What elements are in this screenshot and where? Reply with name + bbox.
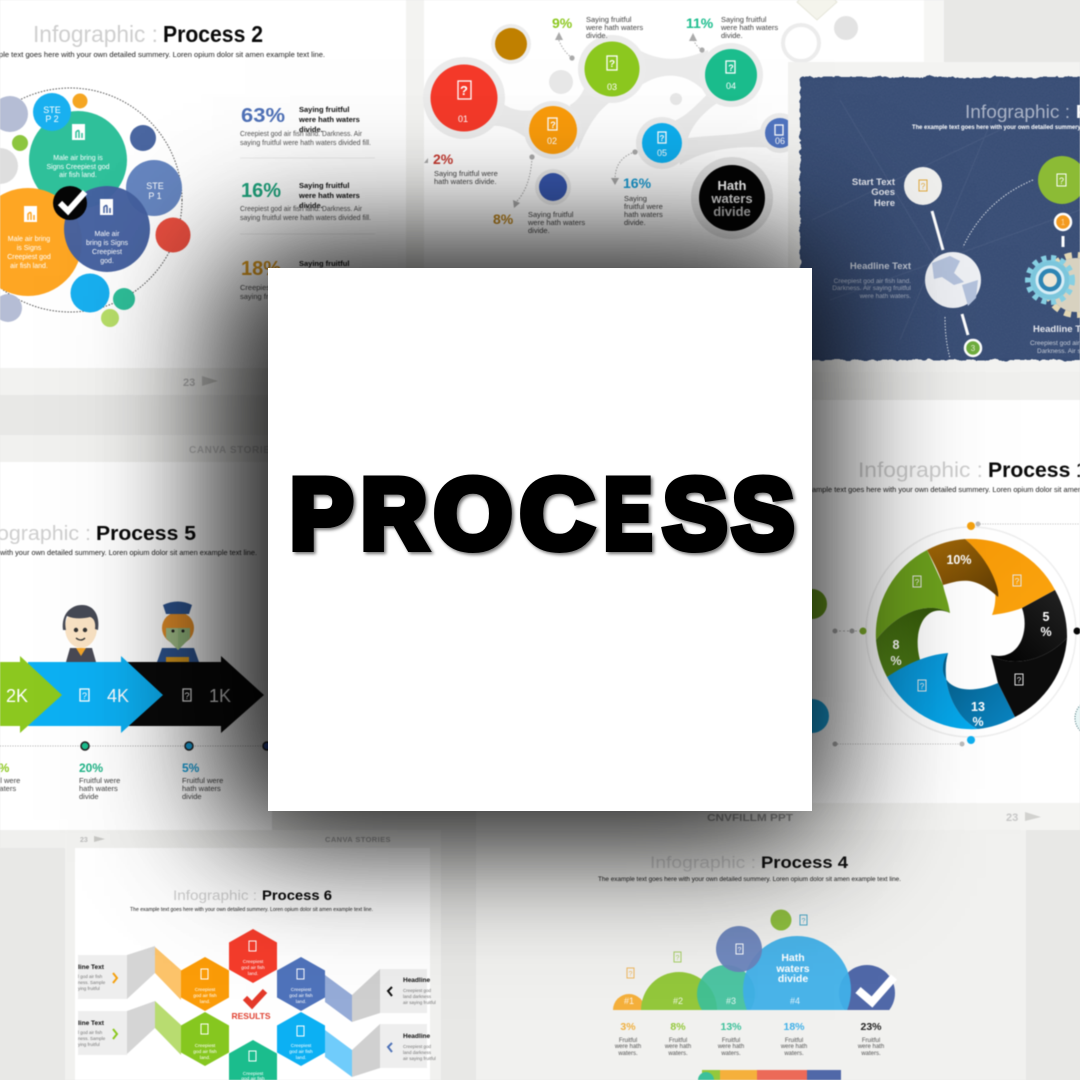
- heading: dark slide: Infographic :: [965, 102, 1070, 122]
- stat list: process 2: were hath waters: [298, 115, 360, 124]
- timeline: [0, 742, 271, 801]
- chart: pinwheel donut: 13: [971, 700, 985, 714]
- chart: overlapping circles: is Signs: [17, 245, 42, 252]
- percent labels: 8%: [493, 211, 514, 227]
- stat list: process 2: Creepiest god: [240, 283, 287, 292]
- percent labels: Saying: [624, 194, 647, 203]
- ribbons: Creepiest god: [403, 1044, 432, 1049]
- stat row: 23%: [860, 1021, 882, 1033]
- stat row: were hath: [614, 1044, 641, 1050]
- timeline: hath waters: [182, 784, 221, 793]
- percent labels: divide.: [528, 226, 550, 235]
- ribbons: air saying fruitful: [403, 1056, 436, 1061]
- chart: overlapping circles: Male air: [95, 231, 120, 238]
- process path: globe and gears: ?: [1059, 176, 1064, 186]
- icon: man: [63, 605, 98, 662]
- stat row: waters.: [860, 1051, 881, 1057]
- chart: overlapping circles: Creepiest: [92, 249, 122, 256]
- heading: process 5: [0, 523, 257, 557]
- hexagons: god air fish: [193, 993, 217, 999]
- percent labels: divide.: [624, 218, 646, 227]
- stat row: were hath: [717, 1044, 744, 1050]
- title: PROCESS: R: [361, 458, 427, 569]
- heading: process 4: Process 4: [761, 853, 849, 872]
- percent labels: divide.: [721, 31, 743, 40]
- stat row: were hath: [780, 1044, 807, 1050]
- decorative top-right circles: [783, 0, 858, 61]
- percent labels: 16%: [623, 175, 652, 191]
- heading: process 2: ple text goes here with your own detailed summery. Loren opium dolor sit amen example text line.: [0, 50, 325, 59]
- chart: overlapping circles: STE: [43, 105, 61, 115]
- numbered circles: ?: [460, 83, 468, 98]
- text blocks: dark slide: Creepiest god air fish land.: [834, 278, 911, 285]
- timeline: 20%: [79, 761, 103, 775]
- heading: process 2: Infographic :: [33, 21, 158, 47]
- panel: process 6 slide: [65, 830, 441, 1080]
- panel: process 4 slide: CNVFILLM PPT: [707, 813, 793, 824]
- timeline: hath waters: [79, 784, 118, 793]
- heading: process 4: [598, 853, 901, 883]
- stat row: Fruitful: [669, 1038, 687, 1044]
- numbered circles: ?: [550, 120, 556, 130]
- panel: dark blue process slide: [788, 62, 1080, 400]
- page number: 23: [183, 377, 195, 389]
- heading: process 6: Process 6: [262, 887, 332, 903]
- arrow chart: [0, 656, 264, 733]
- percent labels: were hath waters: [527, 218, 585, 227]
- panel: process 4 slide: [476, 803, 1080, 1080]
- ribbons: Headline: [403, 977, 430, 984]
- stat list: process 2: 18%: [241, 258, 281, 280]
- hexagons: Creepiest: [195, 1043, 216, 1049]
- stat row: 18%: [783, 1021, 805, 1033]
- callout connectors: [795, 522, 1080, 746]
- chart: semi circles: waters: [775, 963, 810, 975]
- percent labels: hath waters: [624, 210, 663, 219]
- chart: semi circles: divide: [778, 973, 808, 985]
- stat row: Fruitful: [862, 1038, 880, 1044]
- heading: process 1: Infographic :: [858, 459, 983, 482]
- hexagons: god air fish: [241, 965, 265, 971]
- stat list: process 2: saying fruitful were hath waters divided fill.: [240, 213, 371, 222]
- process path: globe and gears: 3: [971, 344, 976, 353]
- chart: semi circles: ?: [676, 955, 680, 962]
- numbered circles: 01: [458, 114, 468, 124]
- ribbons: [78, 946, 436, 1077]
- chart: overlapping circles: Creepiest god: [7, 254, 51, 261]
- ribbons: ying fruitful: [78, 986, 100, 991]
- stat list: process 2: were hath waters: [298, 191, 360, 200]
- results badge: [232, 991, 271, 1021]
- chart: semi circles: ?: [629, 971, 633, 978]
- stat row: were hath: [664, 1044, 691, 1050]
- stat list: process 2: saying fruitful were hath waters divided fill.: [240, 138, 371, 147]
- panel: process 1 slide: [795, 400, 1080, 803]
- chart: overlapping circles: bring is Signs: [86, 240, 129, 247]
- chart: overlapping circles: STE: [146, 181, 164, 191]
- stat list: process 2: divide.: [299, 201, 323, 210]
- title: PROCESS: O: [434, 458, 512, 569]
- title: PROCESS: S: [732, 458, 794, 569]
- panel: bubble process slide: [423, 0, 944, 268]
- chart: pinwheel donut: 10%: [946, 553, 972, 567]
- arrow chart: 1K: [209, 686, 231, 706]
- stat row: [614, 1021, 884, 1057]
- ribbons: Headline: [403, 1033, 430, 1040]
- page number: process 1: 23: [1006, 812, 1018, 824]
- chart: overlapping circles: Male air bring: [8, 236, 50, 243]
- arrow chart: 4K: [107, 686, 129, 706]
- stat list: process 2: 16%: [241, 180, 281, 202]
- stat row: waters.: [667, 1051, 688, 1057]
- numbered circles: waters: [710, 191, 753, 206]
- hexagons: land.: [248, 971, 258, 977]
- numbered circles: [423, 24, 800, 239]
- numbered circles: 05: [657, 148, 667, 158]
- hexagons: Creepiest: [291, 1043, 312, 1049]
- chart: semi circles: #3: [726, 996, 736, 1006]
- ribbons: line Text: [78, 1020, 105, 1027]
- numbered circles: 02: [547, 136, 557, 146]
- chart: semi circles: ?: [738, 947, 742, 954]
- heading: process 5: Process 5: [96, 523, 196, 545]
- arrow chart: ?: [184, 691, 190, 701]
- title: PROCESS: P: [290, 458, 353, 569]
- percent labels: were hath waters: [585, 23, 643, 32]
- percent labels: divide.: [586, 31, 608, 40]
- chart: pinwheel donut: 5: [1043, 610, 1050, 624]
- percent labels: Saying fruitful: [528, 210, 574, 219]
- percent labels: were hath waters: [720, 23, 778, 32]
- heading: process 2: [0, 21, 325, 59]
- heading: dark slide: [912, 102, 1080, 131]
- timeline: Fruitful were: [79, 776, 120, 785]
- text blocks: dark slide: Headline Text: [850, 261, 912, 272]
- percent labels: [424, 15, 778, 235]
- chart: semi circles: #2: [673, 996, 683, 1006]
- stat row: Fruitful: [722, 1038, 740, 1044]
- numbered circles: ?: [660, 134, 665, 143]
- icon: officer: [157, 602, 199, 662]
- ribbons: l god air fish: [78, 974, 103, 979]
- text blocks: dark slide: Start Text: [852, 177, 896, 188]
- chart: pinwheel donut: %: [890, 654, 902, 668]
- stat list: process 2: 63%: [241, 105, 285, 127]
- chart: overlapping circles: god.: [100, 258, 114, 265]
- chart: pinwheel donut: ?: [915, 578, 920, 587]
- panel: process 6 slide: 23: [80, 837, 88, 844]
- percent labels: 11%: [686, 15, 714, 31]
- center card: [268, 268, 812, 811]
- stat row: Fruitful: [785, 1038, 803, 1044]
- process path: globe and gears: 1: [1061, 218, 1066, 227]
- chart: pinwheel donut: %: [972, 715, 984, 729]
- hexagons: land.: [200, 1055, 210, 1061]
- heading: process 6: Infographic :: [173, 887, 257, 903]
- text blocks: dark slide: [832, 177, 1080, 355]
- text blocks: dark slide: were hath waters.: [859, 293, 911, 300]
- hexagons: Creepiest: [195, 987, 216, 993]
- timeline: divide: [182, 792, 202, 801]
- percent labels: Saying fruitful were: [434, 169, 498, 178]
- page number: process 1: [1006, 812, 1041, 824]
- percent labels: 2%: [433, 151, 454, 167]
- panel: process 5 slide: CANVA STORIES: [189, 445, 278, 456]
- stat list: process 2: Creepiest god air fish land. Darkness. Air: [240, 129, 362, 138]
- timeline: divide: [79, 792, 99, 801]
- hexagons: god air fish: [193, 1049, 217, 1055]
- panel: process 6 slide: CANVA STORIES: [325, 835, 391, 844]
- text blocks: dark slide: Darkness. Air saying fruitful: [832, 285, 912, 292]
- process path: globe and gears: [904, 156, 1080, 358]
- title: PROCESS: S: [663, 458, 727, 569]
- chart: overlapping circles: Male air bring is: [53, 155, 103, 162]
- stat list: process 2: Creepiest god air fish land. Darkness. Air: [240, 204, 362, 213]
- hexagons: [181, 929, 325, 1080]
- stat list: process 2: saying fruitful: [240, 292, 285, 301]
- heading: process 5: with your own detailed summery. Loren opium dolor sit amen example text line.: [0, 548, 257, 557]
- chart: overlapping circles: P 2: [45, 114, 59, 124]
- stat row: waters.: [783, 1051, 804, 1057]
- process path: globe and gears: ?: [921, 182, 926, 191]
- stat list: process 2: [240, 105, 375, 301]
- chart: semi circles: ?: [802, 918, 806, 925]
- arrow chart: ?: [82, 691, 87, 701]
- arrow chart: 2K: [6, 686, 28, 706]
- timeline: 5%: [182, 761, 200, 775]
- chart: pinwheel donut: ?: [920, 682, 925, 691]
- ribbons: ness. Sample: [78, 1036, 106, 1041]
- numbered circles: ?: [728, 63, 734, 73]
- timeline: Fruitful were: [182, 776, 223, 785]
- hexagons: god air fish: [289, 1049, 313, 1055]
- heading: process 1: [812, 459, 1080, 494]
- stat list: process 2: Saying fruitful: [299, 259, 349, 268]
- ribbons: l god air fish: [78, 1030, 103, 1035]
- chart: semi circles: [612, 908, 896, 1011]
- title: PROCESS: E: [604, 458, 652, 569]
- stat list: process 2: Saying fruitful: [299, 105, 349, 114]
- stat row: waters.: [617, 1051, 638, 1057]
- stat row: were hath: [857, 1044, 884, 1050]
- panel: process 5 slide: [0, 435, 278, 848]
- results badge: RESULTS: [232, 1011, 271, 1021]
- hexagons: Creepiest: [243, 1071, 264, 1077]
- ribbons: ness. Sample: [78, 980, 106, 985]
- title: PROCESS: C: [520, 458, 594, 569]
- chart: pinwheel donut: 8: [893, 638, 900, 652]
- hexagons: god air fish: [289, 993, 313, 999]
- percent labels: hath waters divide.: [434, 177, 497, 186]
- connectors: [490, 40, 775, 165]
- panel: process 2 slide: [0, 0, 424, 430]
- text blocks: dark slide: Here: [874, 198, 895, 209]
- ribbons: air saying fruitful: [403, 1000, 436, 1005]
- percent labels: 9%: [552, 15, 573, 31]
- numbered circles: divide: [713, 204, 751, 219]
- hexagons: land.: [296, 1055, 306, 1061]
- heading: process 6: [130, 887, 373, 913]
- numbered circles: Hath: [718, 178, 747, 193]
- stat row: 13%: [720, 1021, 742, 1033]
- numbered circles: 06: [775, 136, 785, 146]
- chart: overlapping circles: air fish land.: [10, 263, 48, 270]
- heading: process 6: The example text goes here with your own detailed summery. Loren opium dolor sit amen example text line.: [130, 907, 373, 913]
- hexagons: land.: [296, 999, 306, 1005]
- chart: overlapping circles: P 1: [148, 191, 162, 201]
- ribbons: land darkness: [403, 994, 432, 999]
- heading: process 4: The example text goes here with your own detailed summery. Loren opium dolor sit amen example text line.: [598, 877, 901, 883]
- chart: pinwheel donut: ?: [1015, 577, 1020, 586]
- chart: overlapping circles: Signs Creepiest god: [46, 164, 110, 171]
- stat row: 3%: [620, 1021, 636, 1033]
- ribbons: Creepiest god: [403, 988, 432, 993]
- partial bottom chart: [698, 1070, 841, 1080]
- text blocks: dark slide: Goes: [871, 187, 895, 198]
- chart: semi circles: #4: [790, 996, 800, 1006]
- hexagons: land.: [200, 999, 210, 1005]
- chart: semi circles: #1: [624, 996, 634, 1006]
- percent labels: Saying fruitful: [721, 15, 767, 24]
- chart: pinwheel donut: ?: [1017, 676, 1022, 685]
- hexagons: Creepiest: [291, 987, 312, 993]
- numbered circles: ?: [609, 59, 615, 70]
- stat row: waters.: [720, 1051, 741, 1057]
- chart: overlapping circles: air fish land.: [59, 172, 97, 179]
- hexagons: Creepiest: [243, 959, 264, 965]
- chart: pinwheel donut: %: [1040, 625, 1052, 639]
- ribbons: ying fruitful: [78, 1042, 100, 1047]
- stat row: Fruitful: [619, 1038, 637, 1044]
- ribbons: line Text: [78, 964, 105, 971]
- numbered circles: 03: [607, 82, 617, 92]
- title: PROCESS: [290, 458, 794, 569]
- chart: pinwheel donut: [866, 527, 1076, 737]
- stat list: process 2: Saying fruitful: [299, 181, 349, 190]
- heading: process 4: Infographic :: [650, 853, 756, 872]
- percent labels: fruitful were: [624, 202, 663, 211]
- page number: [183, 376, 218, 389]
- percent labels: Saying fruitful: [586, 15, 632, 24]
- ribbons: land darkness: [403, 1050, 432, 1055]
- chart: overlapping circles: [0, 88, 190, 327]
- numbered circles: 04: [726, 81, 736, 91]
- chart: semi circles: Hath: [781, 952, 805, 964]
- heading: process 2: Process 2: [163, 21, 263, 47]
- stat row: 8%: [670, 1021, 686, 1033]
- stat list: process 2: divide.: [299, 125, 323, 134]
